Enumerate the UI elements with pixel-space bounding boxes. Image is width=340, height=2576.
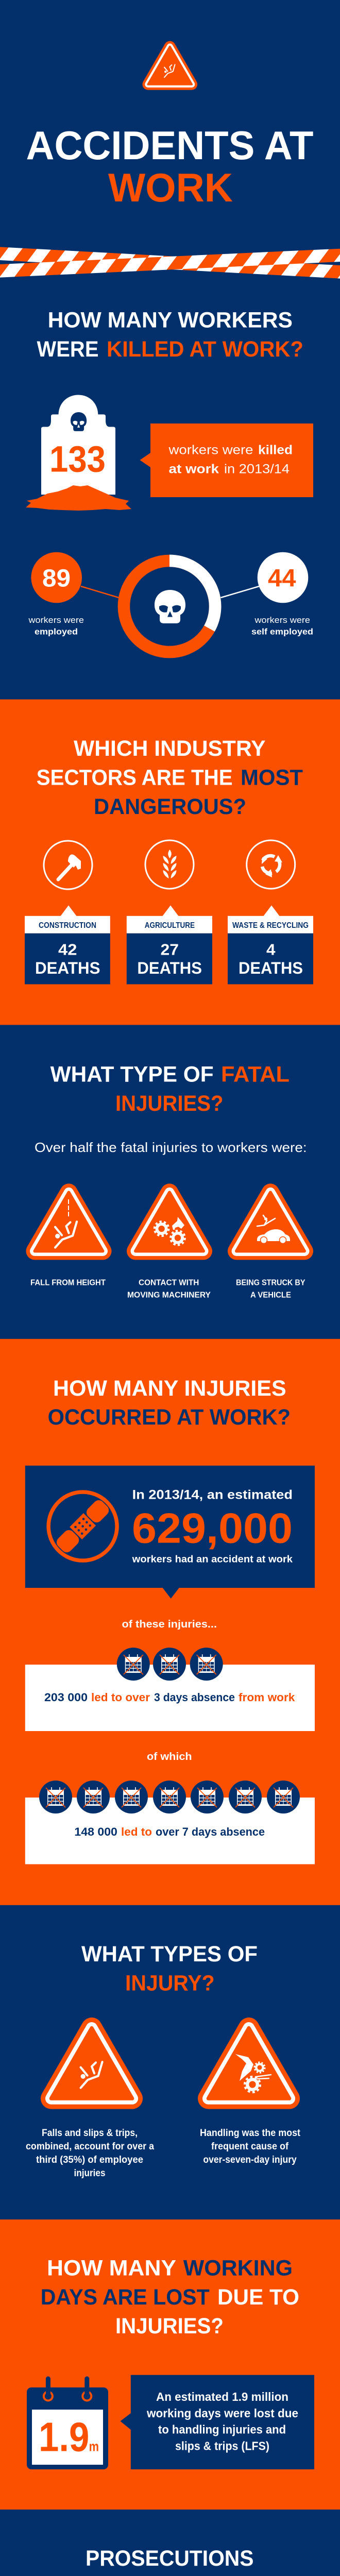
- title: ACCIDENTS AT: [26, 123, 313, 168]
- sign: fall from height: [30, 1192, 106, 1287]
- card: construction: DEATHS: [35, 959, 100, 977]
- sign: falls slips trips: Falls and slips & trips,: [42, 2128, 138, 2139]
- callout: workers killed: at work: [169, 462, 219, 477]
- sign: handling: Handling was the most: [200, 2128, 301, 2139]
- card: 3 days absence: 203 000: [44, 1691, 88, 1704]
- callout: workers killed: workers were: [168, 443, 253, 457]
- panel: types of injury: [26, 1942, 301, 2179]
- heading: OCCURRED AT WORK?: [48, 1405, 291, 1430]
- heading: [37, 736, 303, 819]
- sign: falls slips trips: combined, account for over a: [26, 2141, 154, 2152]
- card: 7 days absence: [25, 1781, 315, 1864]
- sign: struck by vehicle: BEING STRUCK BY: [236, 1279, 305, 1287]
- heading: WHAT TYPES OF: [81, 1942, 258, 1967]
- callout: workers killed: in 2013/14: [224, 462, 290, 477]
- sign: handling: frequent cause of: [211, 2141, 289, 2152]
- donut chart: employed vs self employed: [81, 561, 259, 652]
- callout: 1.9 million days: working days were lost due: [146, 2406, 298, 2420]
- card: agriculture: [127, 905, 212, 984]
- icon: calendar 1.9m: m: [89, 2438, 99, 2454]
- callout: 629,000: workers had an accident at work: [132, 1554, 293, 1565]
- icon: gravestone: [26, 395, 131, 511]
- heading: WERE: [37, 337, 99, 362]
- heading: PROSECUTIONS: [86, 2546, 253, 2571]
- heading: [41, 2256, 299, 2338]
- panel: how many workers were killed: [26, 308, 313, 652]
- icon: calendar 1.9m: [27, 2379, 108, 2469]
- stat: 89 employed: 89: [42, 565, 71, 592]
- text: of these injuries: of these injuries...: [122, 1619, 217, 1630]
- callout: 1.9 million days: slips & trips (LFS): [175, 2439, 269, 2452]
- card: waste and recycling: 4: [266, 940, 276, 958]
- heading: DANGEROUS?: [94, 794, 246, 819]
- card: waste and recycling: DEATHS: [239, 959, 303, 977]
- panel: how many injuries: [0, 1339, 340, 1905]
- panel: header: [0, 47, 340, 279]
- heading: DUE TO: [217, 2285, 299, 2310]
- callout: 629,000: 629,000: [132, 1504, 293, 1552]
- card: agriculture: 27: [161, 940, 179, 958]
- heading: WHAT TYPE OF: [50, 1062, 214, 1087]
- icon: gravestone: 133: [49, 439, 106, 480]
- sign: falls slips trips: injuries: [74, 2168, 105, 2179]
- title: [26, 123, 313, 210]
- callout: 629,000: [25, 1466, 315, 1599]
- icon: hammer: [44, 841, 92, 889]
- card: construction: 42: [58, 940, 77, 958]
- card: agriculture: DEATHS: [137, 959, 202, 977]
- heading: HOW MANY INJURIES: [53, 1376, 286, 1401]
- hazard tape: [0, 247, 340, 279]
- sign: struck by vehicle: [236, 1192, 305, 1299]
- icon: warning triangle falling worker: [148, 47, 192, 84]
- callout: 1.9 million days: An estimated 1.9 million: [156, 2390, 288, 2403]
- callout: 1.9 million days: [121, 2375, 314, 2469]
- heading: HOW MANY WORKERS: [48, 308, 293, 333]
- sign: falls slips trips: [26, 2028, 154, 2179]
- card: waste and recycling: [228, 905, 313, 984]
- heading: INJURIES?: [115, 2314, 224, 2338]
- card: construction: CONSTRUCTION: [39, 921, 96, 930]
- panel: dangerous sectors: [0, 700, 340, 1025]
- heading: INJURY?: [125, 1971, 215, 1996]
- title: WORK: [108, 165, 233, 210]
- heading: WORKING: [183, 2256, 293, 2280]
- sign: moving machinery: [127, 1192, 211, 1299]
- stat: 89 employed: [28, 552, 84, 637]
- card: construction: [25, 905, 110, 984]
- heading: [48, 1376, 291, 1430]
- heading: MOST: [241, 766, 303, 790]
- stat: 89 employed: workers were: [28, 615, 84, 625]
- card: 7 days absence: over 7 days absence: [156, 1825, 265, 1838]
- stat: 44 self employed: workers were: [254, 615, 310, 625]
- sign: moving machinery: CONTACT WITH: [139, 1279, 199, 1287]
- heading: SECTORS ARE THE: [37, 766, 233, 790]
- sign: handling: [200, 2028, 301, 2165]
- card: 3 days absence: from work: [239, 1691, 295, 1704]
- heading: FATAL: [221, 1062, 290, 1087]
- stat: 89 employed: employed: [35, 627, 78, 637]
- heading: [50, 1062, 290, 1116]
- card: 7 days absence: 148 000: [74, 1825, 117, 1838]
- heading: WHICH INDUSTRY: [74, 736, 266, 761]
- card: agriculture: AGRICULTURE: [145, 921, 195, 930]
- panel: fatal injuries: [30, 1062, 307, 1299]
- callout: workers killed: killed: [258, 443, 293, 457]
- heading: HOW MANY: [47, 2256, 176, 2280]
- heading: DAYS ARE LOST: [41, 2285, 210, 2310]
- sign: struck by vehicle: A VEHICLE: [250, 1291, 291, 1299]
- sign: handling: over-seven-day injury: [203, 2155, 297, 2165]
- text: of which: of which: [147, 1751, 192, 1762]
- icon: bandage: [48, 1492, 117, 1561]
- card: 3 days absence: led to over: [91, 1691, 150, 1704]
- icon: recycling arrows: [247, 840, 295, 889]
- stat: 44 self employed: [251, 552, 313, 637]
- icon: wheat: [145, 840, 194, 889]
- card: waste and recycling: WASTE & RECYCLING: [232, 921, 309, 930]
- sign: falls slips trips: third (35%) of employee: [36, 2155, 143, 2165]
- panel: working days lost: [0, 2219, 340, 2510]
- heading: [37, 308, 303, 362]
- callout: 629,000: In 2013/14, an estimated: [132, 1488, 293, 1502]
- heading: [81, 1942, 258, 1996]
- sign: fall from height: FALL FROM HEIGHT: [30, 1279, 106, 1287]
- heading: KILLED AT WORK?: [107, 337, 303, 362]
- card: 7 days absence: led to: [121, 1825, 152, 1838]
- card: 3 days absence: [25, 1648, 315, 1731]
- card: 3 days absence: 3 days absence: [154, 1691, 235, 1704]
- stat: 44 self employed: self employed: [251, 627, 313, 637]
- icon: calendar 1.9m: 1.9: [39, 2414, 89, 2460]
- stat: 44 self employed: 44: [268, 565, 296, 592]
- sign: moving machinery: MOVING MACHINERY: [127, 1291, 211, 1299]
- heading: INJURIES?: [115, 1091, 224, 1116]
- intro text: Over half the fatal injuries to workers were:: [35, 1140, 307, 1155]
- callout: 1.9 million days: to handling injuries and: [158, 2423, 286, 2436]
- callout: workers killed: [140, 423, 313, 497]
